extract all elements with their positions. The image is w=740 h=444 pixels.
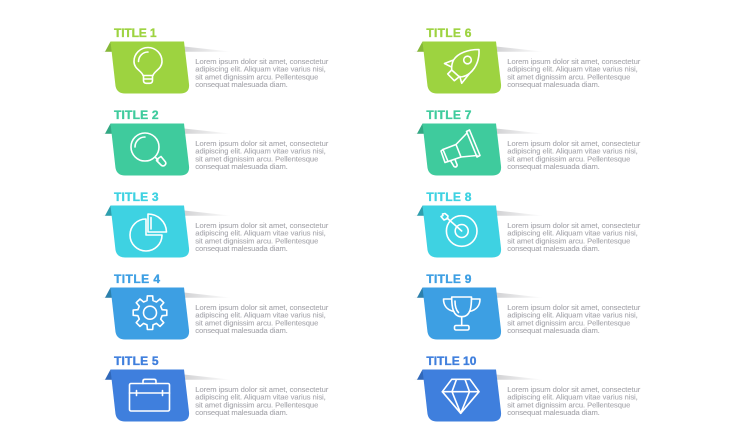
text block: item 4 body: Lorem ipsum dolor sit amet, consectetur — [195, 303, 329, 312]
heading: title 6: TITLE 6 — [426, 26, 472, 40]
card: item 8 ribbon — [412, 206, 544, 258]
text block: item 6 body: sit amet dignissim arcu. Pellentesque — [507, 72, 630, 81]
text block: item 9 body: consequat malesuada diam. — [507, 326, 600, 335]
text block: item 10 body: adipiscing elit. Aliquam vitae varius nisi, — [507, 393, 638, 402]
text block: item 9 body: adipiscing elit. Aliquam vitae varius nisi, — [507, 311, 638, 320]
text block: item 4 body: adipiscing elit. Aliquam vitae varius nisi, — [195, 311, 326, 320]
text block: item 9 body — [507, 303, 641, 335]
text block: item 7 body: Lorem ipsum dolor sit amet, consectetur — [507, 139, 641, 148]
icon: pie chart — [130, 214, 166, 251]
text block: item 6 body: adipiscing elit. Aliquam vitae varius nisi, — [507, 65, 638, 74]
panel: item 9 — [412, 272, 641, 340]
panel: item 10 — [412, 354, 641, 422]
text block: item 7 body: adipiscing elit. Aliquam vitae varius nisi, — [507, 147, 638, 156]
text block: item 6 body: consequat malesuada diam. — [507, 80, 600, 89]
panel: item 8 — [412, 190, 641, 258]
heading: title 10: TITLE 10 — [426, 354, 477, 368]
icon: gear — [133, 296, 167, 329]
text block: item 10 body: consequat malesuada diam. — [507, 408, 600, 417]
card: item 1 ribbon — [100, 42, 232, 94]
text block: item 5 body — [195, 385, 329, 417]
card: item 6 ribbon — [412, 42, 544, 94]
text block: item 8 body: consequat malesuada diam. — [507, 244, 600, 253]
text block: item 3 body: adipiscing elit. Aliquam vitae varius nisi, — [195, 229, 326, 238]
text block: item 6 body — [507, 57, 641, 89]
heading: title 5: TITLE 5 — [114, 354, 159, 368]
text block: item 7 body: sit amet dignissim arcu. Pellentesque — [507, 154, 630, 163]
panel: item 5 — [100, 354, 329, 422]
card: item 2 ribbon — [100, 124, 232, 176]
text block: item 7 body — [507, 139, 641, 171]
icon: target with arrow — [441, 214, 477, 246]
text block: item 5 body: Lorem ipsum dolor sit amet, consectetur — [195, 385, 329, 394]
text block: item 3 body: consequat malesuada diam. — [195, 244, 288, 253]
text block: item 2 body — [195, 139, 329, 171]
text block: item 5 body: adipiscing elit. Aliquam vitae varius nisi, — [195, 393, 326, 402]
icon: magnifying glass — [131, 133, 166, 166]
card: item 5 ribbon — [100, 370, 232, 422]
text block: item 3 body: Lorem ipsum dolor sit amet, consectetur — [195, 221, 329, 230]
text block: item 1 body: consequat malesuada diam. — [195, 80, 288, 89]
icon: briefcase — [130, 379, 170, 411]
heading: title 1: TITLE 1 — [114, 26, 157, 40]
heading: title 3: TITLE 3 — [114, 190, 159, 204]
text block: item 2 body: adipiscing elit. Aliquam vitae varius nisi, — [195, 147, 326, 156]
icon: trophy — [444, 297, 480, 330]
text block: item 1 body: Lorem ipsum dolor sit amet, consectetur — [195, 57, 329, 66]
text block: item 10 body: Lorem ipsum dolor sit amet, consectetur — [507, 385, 641, 394]
panel: item 4 — [100, 272, 329, 340]
heading: title 9: TITLE 9 — [426, 272, 472, 286]
text block: item 9 body: Lorem ipsum dolor sit amet, consectetur — [507, 303, 641, 312]
icon: megaphone — [441, 130, 480, 167]
text block: item 8 body — [507, 221, 641, 253]
text block: item 1 body — [195, 57, 329, 89]
heading: title 7: TITLE 7 — [426, 108, 472, 122]
text block: item 7 body: consequat malesuada diam. — [507, 162, 600, 171]
panel: item 7 — [412, 108, 641, 176]
text block: item 3 body — [195, 221, 329, 253]
text block: item 4 body: consequat malesuada diam. — [195, 326, 288, 335]
text block: item 10 body: sit amet dignissim arcu. Pellentesque — [507, 400, 630, 409]
card: item 7 ribbon — [412, 124, 544, 176]
text block: item 5 body: consequat malesuada diam. — [195, 408, 288, 417]
text block: item 1 body: sit amet dignissim arcu. Pellentesque — [195, 72, 318, 81]
text block: item 6 body: Lorem ipsum dolor sit amet, consectetur — [507, 57, 641, 66]
text block: item 10 body — [507, 385, 641, 417]
text block: item 8 body: Lorem ipsum dolor sit amet, consectetur — [507, 221, 641, 230]
text block: item 8 body: sit amet dignissim arcu. Pellentesque — [507, 236, 630, 245]
icon: rocket — [444, 50, 479, 83]
heading: title 8: TITLE 8 — [426, 190, 472, 204]
icon: diamond — [442, 379, 479, 413]
text block: item 2 body: consequat malesuada diam. — [195, 162, 288, 171]
card: item 10 ribbon — [412, 370, 544, 422]
heading: title 2: TITLE 2 — [114, 108, 159, 122]
card: item 4 ribbon — [100, 288, 232, 340]
card: item 3 ribbon — [100, 206, 232, 258]
text block: item 4 body: sit amet dignissim arcu. Pellentesque — [195, 318, 318, 327]
panel: item 6 — [412, 26, 641, 94]
text block: item 9 body: sit amet dignissim arcu. Pellentesque — [507, 318, 630, 327]
card: item 9 ribbon — [412, 288, 544, 340]
heading: title 4: TITLE 4 — [114, 272, 160, 286]
text block: item 2 body: Lorem ipsum dolor sit amet, consectetur — [195, 139, 329, 148]
text block: item 1 body: adipiscing elit. Aliquam vitae varius nisi, — [195, 65, 326, 74]
text block: item 4 body — [195, 303, 329, 335]
text block: item 5 body: sit amet dignissim arcu. Pellentesque — [195, 400, 318, 409]
panel: item 3 — [100, 190, 329, 258]
text block: item 3 body: sit amet dignissim arcu. Pellentesque — [195, 236, 318, 245]
icon: light bulb — [134, 48, 162, 83]
text block: item 8 body: adipiscing elit. Aliquam vitae varius nisi, — [507, 229, 638, 238]
panel: item 2 — [100, 108, 329, 176]
text block: item 2 body: sit amet dignissim arcu. Pellentesque — [195, 154, 318, 163]
panel: item 1 — [100, 26, 329, 94]
